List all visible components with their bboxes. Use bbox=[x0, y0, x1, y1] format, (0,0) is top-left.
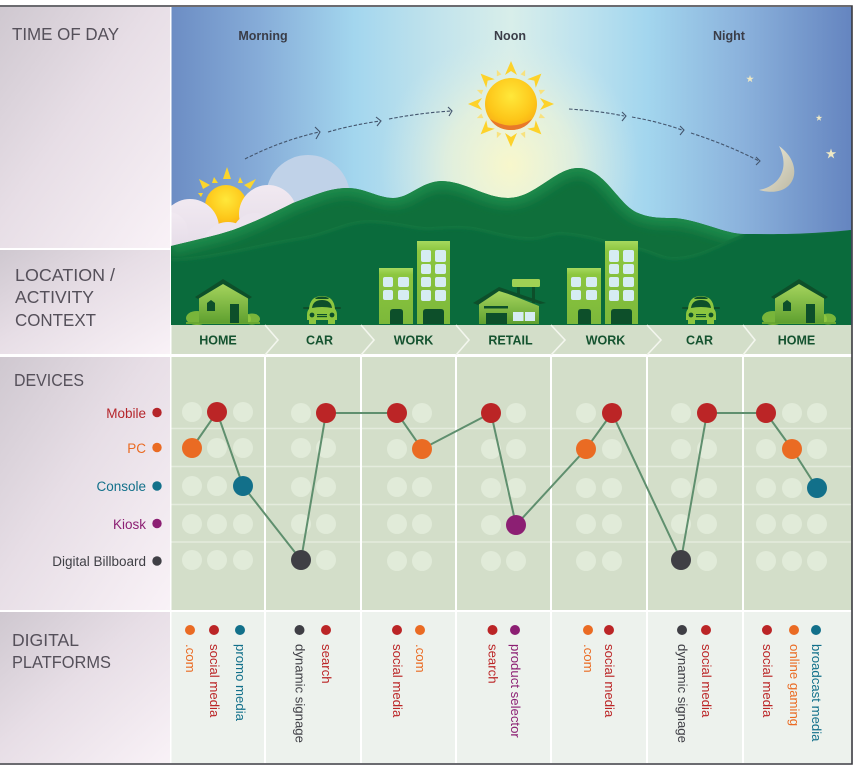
left panel: time of day bbox=[0, 7, 170, 248]
back hills bbox=[171, 168, 851, 258]
sky scene bbox=[172, 7, 852, 325]
platform labels: product selector bbox=[508, 644, 523, 738]
platform labels: social media bbox=[602, 644, 617, 718]
icon: work buildings bbox=[379, 241, 450, 324]
heading: digital platforms bbox=[12, 630, 111, 672]
legend: kiosk bbox=[113, 517, 162, 532]
platform labels: social media bbox=[390, 644, 405, 718]
icon: morning cloud and sun bbox=[172, 155, 349, 246]
icon: stars bbox=[746, 75, 836, 158]
journey line bbox=[192, 412, 817, 560]
time labels: Night bbox=[713, 29, 746, 43]
platform labels: promo media bbox=[233, 644, 248, 722]
time labels: Noon bbox=[494, 29, 526, 43]
platform labels: .com bbox=[413, 644, 428, 673]
heading: devices: DEVICES bbox=[14, 370, 84, 390]
icon: crescent moon bbox=[759, 146, 794, 192]
chevron labels bbox=[199, 334, 815, 348]
left panel: location bbox=[0, 250, 170, 354]
platform labels: online gaming bbox=[787, 644, 802, 726]
legend: console: Console bbox=[96, 479, 146, 494]
heading: digital platforms: DIGITAL bbox=[12, 630, 79, 650]
heading: digital platforms: PLATFORMS bbox=[12, 652, 111, 672]
time labels bbox=[238, 29, 746, 43]
legend: pc: PC bbox=[127, 441, 146, 456]
icon: car bbox=[303, 296, 341, 324]
legend: digital billboard: Digital Billboard bbox=[52, 554, 146, 569]
icon: work buildings 2 bbox=[567, 241, 638, 324]
heading: location activity context bbox=[15, 265, 115, 330]
device chart bbox=[172, 355, 852, 763]
chevron labels: CAR bbox=[306, 334, 333, 348]
platform labels: dynamic signage bbox=[292, 644, 308, 743]
heading: location activity context: ACTIVITY bbox=[15, 287, 94, 307]
location chevron band bbox=[172, 325, 852, 355]
legend: mobile: Mobile bbox=[106, 406, 146, 421]
platform labels: broadcast media bbox=[809, 644, 824, 742]
icon: car 2 bbox=[682, 296, 720, 324]
platform labels: dynamic signage bbox=[675, 644, 690, 743]
legend: pc bbox=[127, 441, 162, 456]
front hills bbox=[178, 230, 850, 258]
heading: location activity context: CONTEXT bbox=[15, 310, 96, 330]
chevron labels: CAR bbox=[686, 334, 713, 348]
platform labels: search bbox=[319, 644, 334, 684]
platforms panel bbox=[172, 612, 851, 763]
arrow: sun path bbox=[245, 107, 760, 165]
platform labels: social media bbox=[760, 644, 775, 718]
platform dots bbox=[185, 625, 821, 635]
heading: location activity context: LOCATION / bbox=[15, 265, 115, 285]
chevron labels: HOME bbox=[778, 334, 815, 348]
chevron labels: RETAIL bbox=[488, 334, 533, 348]
platform labels: search bbox=[486, 644, 500, 684]
icon: home bbox=[186, 279, 260, 325]
left panel: digital platforms bbox=[0, 612, 170, 763]
platform labels: .com bbox=[581, 644, 596, 673]
icon: noon sun bbox=[468, 61, 554, 147]
chevron labels: HOME bbox=[199, 334, 237, 348]
platform labels: social media bbox=[699, 644, 714, 718]
icon: home 2 bbox=[762, 279, 836, 325]
active device dots bbox=[182, 402, 827, 570]
legend: kiosk: Kiosk bbox=[113, 517, 146, 532]
platform labels bbox=[183, 644, 824, 743]
platform labels: .com bbox=[183, 644, 198, 673]
icon: retail store bbox=[473, 279, 546, 324]
heading: time of day: TIME OF DAY bbox=[12, 24, 119, 44]
time labels: Morning bbox=[238, 29, 288, 43]
platform labels: social media bbox=[207, 644, 222, 718]
chevron labels: WORK bbox=[586, 334, 625, 348]
inactive dots bbox=[182, 402, 827, 571]
chevron labels: WORK bbox=[394, 334, 433, 348]
left panel: devices legend bbox=[0, 357, 170, 610]
